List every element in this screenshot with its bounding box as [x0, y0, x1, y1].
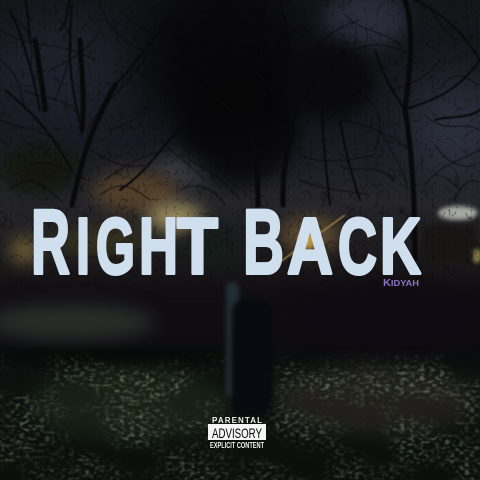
parental text: PARENTAL: [212, 416, 262, 425]
title: Right Back: R: [31, 192, 70, 294]
title: Right Back: C: [338, 202, 377, 290]
parental advisory label: [208, 416, 266, 450]
bare trees: [0, 0, 480, 260]
advisory box: [208, 424, 266, 440]
fine twig texture: [0, 0, 480, 285]
lens flare behind title: [280, 215, 345, 262]
title: Right Back: T: [177, 202, 218, 290]
explicit content text: EXPLICIT CONTENT: [210, 441, 264, 450]
title: Right Back: A: [287, 202, 333, 290]
title: Right Back: B: [243, 192, 284, 294]
advisory text: ADVISORY: [212, 425, 262, 441]
title: Right Back: I: [76, 202, 90, 290]
ghostly blurred figure: [226, 282, 272, 415]
grass texture: [0, 350, 480, 480]
title: Right Back: K: [380, 202, 421, 290]
artist name: Kidyah: KIDYAH: [383, 278, 419, 289]
title: Right Back: H: [139, 202, 178, 290]
title: Right Back: G: [96, 202, 135, 290]
